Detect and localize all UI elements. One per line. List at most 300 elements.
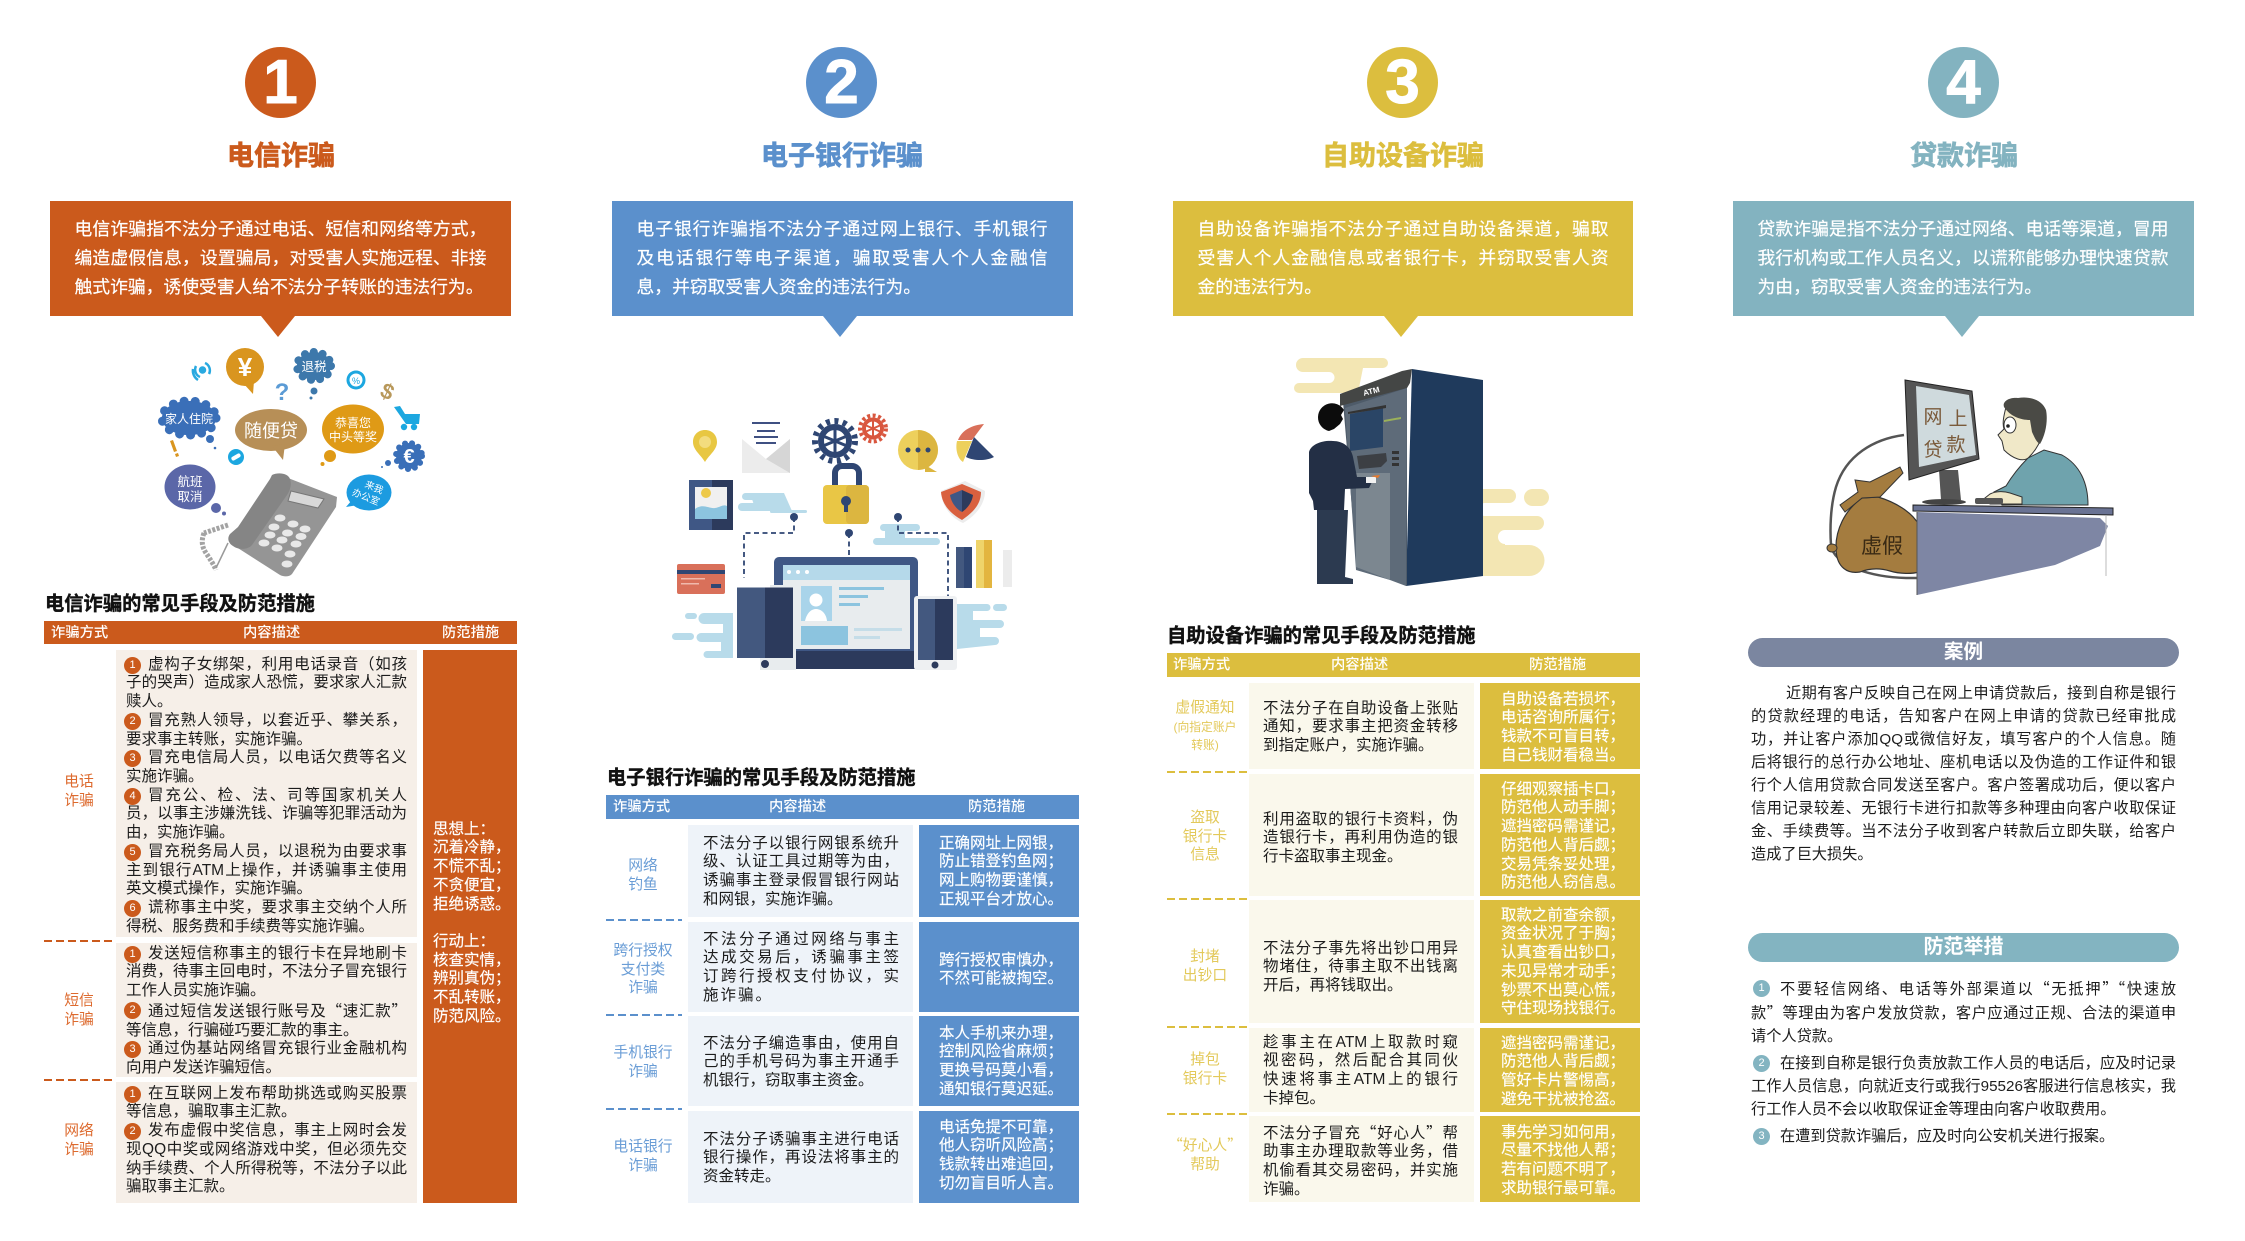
table header row: 防范措施: [442, 625, 499, 641]
text block: case study: 行个人信用贷款合同发送至客户。客户签署成功后，便以客户: [1751, 776, 2176, 794]
cell: telephone banking prevention: 他人窃听风险高；: [939, 1137, 1063, 1154]
icon: exclamation: [170, 440, 179, 457]
cell: prevention measures: 不乱转账，: [433, 989, 511, 1006]
cell: phone fraud description: 3: [129, 752, 136, 764]
text block: case study: 金、手续费等。当不法分子收到客户转款后立即失联，给客户: [1751, 822, 2176, 840]
cell: phone fraud description: 冒充电信局人员，以电话欠费等名义: [148, 749, 407, 766]
cell: good samaritan prevention: [1480, 1116, 1640, 1202]
person: [1309, 403, 1380, 584]
table header row: 诈骗方式: [613, 799, 670, 815]
connectors: [744, 517, 948, 598]
callout: telecom fraud definition: 触式诈骗，诱使受害人给不法分子转账的违法行为。: [74, 276, 483, 296]
decorative clouds: [1294, 358, 1549, 576]
badge: number 1: [245, 47, 316, 118]
cell: phone fraud description: 要求事主转账，实施诈骗。: [126, 731, 312, 748]
cell: card swap description: 视密码，然后配合其同伙: [1263, 1052, 1458, 1069]
cell: stolen card prevention: 交易凭条妥处理，: [1501, 856, 1625, 873]
cell: blocked slot prevention: 守住现场找银行。: [1501, 1000, 1625, 1017]
cell: good samaritan prevention: 若有问题不明了，: [1501, 1161, 1625, 1178]
cell: mobile banking description: 不法分子编造事由，使用自: [703, 1035, 899, 1052]
cell: SMS fraud description: 工作人员实施诈骗。: [126, 982, 266, 999]
cell: card swap description: [1249, 1028, 1474, 1112]
cell: cross-bank description: 达成交易后，诱骗事主签: [703, 949, 899, 966]
cell: SMS fraud description: 向用户发送诈骗短信。: [126, 1059, 281, 1076]
bubble: come to my office: 来我: [363, 479, 385, 497]
cell: prevention measures: 辨别真伪；: [433, 970, 511, 987]
cell: internet fraud description: [116, 1082, 417, 1203]
bubble: congratulations first prize: 恭喜您: [335, 415, 371, 430]
label: phishing: [628, 857, 658, 893]
label: card swap: [1183, 1051, 1227, 1087]
icon: desk telephone: [202, 473, 337, 576]
cell: card swap prevention: 管好卡片警惕高，: [1501, 1072, 1625, 1089]
illustration: man at computer with online loan and fake money bag: [1826, 379, 2114, 595]
text block: case study: 信用记录较差、无银行卡进行扣款等多种理由向客户收取保证: [1751, 800, 2176, 816]
label: telephone banking: 诈骗: [628, 1158, 658, 1174]
icon: bank card: [677, 564, 725, 594]
cell: mobile banking prevention: [919, 1016, 1079, 1106]
table: self-service device fraud methods and prevention: [1167, 624, 1640, 1202]
cell: prevention measures: 防范风险。: [433, 1008, 511, 1025]
callout: loan fraud definition: 我行机构或工作人员名义，以谎称能够办理快速贷款: [1758, 248, 2168, 268]
heading: telecom fraud: 电信诈骗: [227, 140, 335, 170]
cell: prevention measures: [423, 650, 517, 1203]
cell: internet fraud description: 在互联网上发布帮助挑选或购买股票: [148, 1085, 407, 1102]
table heading: 电子银行诈骗的常见手段及防范措施: [607, 768, 916, 789]
label: phishing: 网络: [628, 858, 658, 874]
table header row: [606, 795, 1079, 819]
icon: chat bubble: [898, 430, 938, 472]
table header row: 诈骗方式: [51, 625, 108, 641]
bubble: flight cancelled: 航班: [177, 474, 203, 489]
cell: blocked slot prevention: 取款之前查余额，: [1501, 907, 1625, 924]
man at keyboard: [1975, 398, 2088, 505]
cell: SMS fraud description: 等信息，行骗碰巧要汇款的事主。: [126, 1022, 359, 1039]
cell: internet fraud description: 现QQ中奖或网络游戏中奖，但必须先交: [126, 1141, 407, 1158]
text block: case study: [1751, 684, 2176, 862]
table heading: 自助设备诈骗的常见手段及防范措施: [1167, 626, 1476, 647]
table header row: 内容描述: [1331, 657, 1388, 673]
cell: mobile banking description: 己的手机号码为事主开通手: [703, 1053, 899, 1070]
cell: phishing prevention: [919, 825, 1079, 917]
callout: loan fraud definition: [1733, 201, 2194, 337]
label: blocked cash slot: [1183, 948, 1227, 984]
computer monitor: [1905, 380, 1979, 505]
cell: good samaritan prevention: 求助银行最可靠。: [1501, 1180, 1625, 1197]
cell: fake notice description: 不法分子在自助设备上张贴: [1263, 700, 1458, 717]
cell: fake notice prevention: 自助设备若损坏，: [1501, 691, 1625, 708]
decorative clouds: [672, 493, 1007, 658]
text block: prevention measures: 在接到自称是银行负责放款工作人员的电话后，应及时记录: [1780, 1054, 2176, 1072]
cell: phishing description: [688, 825, 913, 917]
cell: stolen card prevention: 防范他人窃信息。: [1501, 874, 1625, 891]
cell: stolen card prevention: 防范他人动手脚；: [1501, 799, 1625, 816]
cell: cross-bank prevention: [919, 922, 1079, 1012]
money bag labelled fake: [1827, 467, 1919, 573]
cell: blocked slot prevention: [1480, 900, 1640, 1023]
callout: loan fraud definition: 为由，窃取受害人资金的违法行为。: [1758, 276, 2042, 296]
label: internet fraud: [64, 1122, 94, 1158]
computer monitor: 款: [1946, 434, 1966, 456]
icon: dollar: $: [377, 377, 398, 405]
cell: phishing prevention: 正确网址上网银，: [939, 835, 1063, 852]
icon: padlock: [823, 466, 869, 524]
cell: fake notice description: 通知，要求事主把资金转移: [1263, 718, 1458, 735]
label: mobile banking: 诈骗: [628, 1064, 658, 1080]
callout: self-service device fraud definition: [1173, 201, 1633, 337]
cell: mobile banking description: [688, 1016, 913, 1106]
banner: case: 案例: [1944, 641, 1983, 663]
callout: e-banking fraud definition: 及电话银行等电子渠道，骗取受害人个人金融信: [636, 248, 1048, 268]
cell: phishing description: 诱骗事主登录假冒银行网站: [703, 872, 899, 889]
banner: prevention measures: 防范举措: [1924, 936, 2004, 958]
cell: good samaritan description: [1249, 1116, 1474, 1202]
label: internet fraud: 诈骗: [64, 1142, 94, 1158]
cell: telephone banking description: 银行操作，再设法将事主的: [703, 1149, 899, 1166]
bubble: congratulations first prize: [320, 404, 384, 466]
cell: prevention measures: 思想上：: [433, 821, 495, 838]
badge: number 3: 3: [1385, 48, 1420, 117]
cell: telephone banking description: 资金转走。: [703, 1168, 781, 1185]
cell: fake notice description: [1249, 683, 1474, 769]
text block: prevention measures: 3: [1758, 1130, 1765, 1142]
cell: prevention measures: 行动上：: [433, 933, 495, 950]
badge: number 3: [1367, 47, 1438, 118]
label: blocked cash slot: 出钞口: [1183, 968, 1227, 984]
cell: prevention measures: 沉着冷静，: [433, 839, 511, 856]
text block: prevention measures: 工作人员信息，向就近支行或我行95526客服进行信息核实，我: [1751, 1078, 2176, 1094]
label: fake notice: [1174, 699, 1236, 752]
table: telecom fraud methods and prevention: [44, 592, 517, 1203]
cell: card swap prevention: 避免干扰被抢盗。: [1501, 1091, 1625, 1108]
cell: fake notice prevention: [1480, 683, 1640, 769]
cell: phishing prevention: 正规平台才放心。: [939, 891, 1063, 908]
text block: case study: 功，并让客户添加QQ或微信好友，填写客户的个人信息。随: [1751, 730, 2176, 748]
label: cross-bank authorisation: 诈骗: [628, 980, 658, 996]
ATM machine: ATM: [1362, 385, 1381, 398]
label: internet fraud: 网络: [64, 1123, 94, 1139]
bubble: yen: [226, 348, 264, 394]
table header row: 诈骗方式: [1173, 657, 1230, 673]
bubble: family hospitalised: [162, 401, 216, 449]
bubble: euro: €: [403, 446, 415, 468]
table header row: 内容描述: [243, 625, 300, 641]
cell: stolen card description: 造银行卡，再利用伪造的银: [1263, 829, 1458, 846]
bubble: flight cancelled: 取消: [177, 490, 203, 504]
bubble: congratulations first prize: 中头等奖: [329, 429, 377, 444]
desk: [1913, 505, 2113, 595]
cell: phone fraud description: 1: [129, 659, 136, 671]
cell: phishing description: 和网银，实施诈骗。: [703, 891, 843, 908]
cell: SMS fraud description: 发送短信称事主的银行卡在异地刷卡: [148, 945, 407, 962]
label: SMS fraud: [64, 992, 94, 1028]
label: phishing: 钓鱼: [628, 877, 658, 893]
icon: wifi signal: [193, 363, 210, 380]
label: stolen card data: 信息: [1190, 847, 1220, 863]
label: good samaritan help: “好心人”: [1168, 1134, 1242, 1155]
cell: stolen card prevention: [1480, 774, 1640, 896]
heading: e-banking fraud: 电子银行诈骗: [761, 140, 923, 170]
label: phone fraud: [64, 773, 94, 809]
cell: blocked slot prevention: 认真查看出钞口，: [1501, 944, 1625, 961]
cell: card swap prevention: 防范他人背后觑；: [1501, 1053, 1625, 1070]
icon: navy gear: [815, 421, 855, 461]
cell: blocked slot prevention: 未见异常才动手；: [1501, 963, 1625, 980]
cell: stolen card prevention: 防范他人背后觑；: [1501, 837, 1625, 854]
cell: card swap description: 趁事主在ATM上取款时窥: [1263, 1034, 1458, 1051]
cell: good samaritan description: 助事主办理取款等业务，借: [1263, 1143, 1458, 1160]
cell: card swap prevention: [1480, 1028, 1640, 1112]
text block: prevention measures: 不要轻信网络、电话等外部渠道以“无抵押”“快速放: [1780, 976, 2176, 998]
cell: stolen card prevention: 仔细观察插卡口，: [1501, 781, 1625, 798]
cell: phishing description: 不法分子以银行网银系统升: [703, 835, 899, 852]
cell: telephone banking prevention: 电话免提不可靠，: [939, 1119, 1063, 1136]
text block: prevention measures: 在遭到贷款诈骗后，应及时向公安机关进行报案。: [1780, 1128, 2114, 1144]
cell: internet fraud description: 发布虚假中奖信息，事主上网时会发: [148, 1122, 407, 1139]
label: card swap: 掉包: [1190, 1052, 1220, 1068]
label: stolen card data: 银行卡: [1183, 829, 1227, 845]
cell: stolen card description: 利用盗取的银行卡资料，伪: [1263, 811, 1458, 828]
cell: good samaritan description: 诈骗。: [1263, 1181, 1310, 1198]
cell: mobile banking prevention: 控制风险省麻烦；: [939, 1043, 1063, 1060]
cell: phone fraud description: 谎称事主中奖，要求事主交纳个人所: [148, 899, 407, 916]
illustration: online banking devices and icons: [672, 414, 1012, 670]
computer monitor: 贷: [1923, 439, 1943, 461]
cell: blocked slot description: 不法分子事先将出钞口用异: [1263, 940, 1458, 957]
cell: SMS fraud description: 1: [129, 948, 136, 960]
callout: e-banking fraud definition: 电子银行诈骗指不法分子通过网上银行、手机银行: [636, 218, 1048, 238]
cell: cross-bank description: 不法分子通过网络与事主: [703, 931, 899, 948]
cell: telephone banking prevention: [919, 1111, 1079, 1203]
label: stolen card data: 盗取: [1190, 810, 1220, 826]
cell: stolen card prevention: 遮挡密码需谨记，: [1501, 818, 1625, 835]
badge: number 1: 1: [263, 48, 298, 117]
cell: phone fraud description: [116, 650, 417, 937]
table header row: 防范措施: [1529, 657, 1586, 673]
bubble: flight cancelled: [164, 464, 226, 516]
label: SMS fraud: 短信: [64, 993, 94, 1009]
label: telephone banking: [613, 1138, 673, 1174]
cell: prevention measures: 核查实情，: [433, 952, 511, 969]
heading: loan fraud: 贷款诈骗: [1910, 140, 2018, 170]
cell: prevention measures: 拒绝诱惑。: [433, 896, 511, 913]
table header row: [1167, 653, 1640, 677]
cell: stolen card description: 行卡盗取事主现金。: [1263, 848, 1403, 865]
label: SMS fraud: 诈骗: [64, 1012, 94, 1028]
icon: shield: [941, 481, 985, 523]
label: fake notice: 转账): [1191, 738, 1219, 752]
cell: internet fraud description: 骗取事主汇款。: [126, 1178, 235, 1195]
cell: prevention measures: 不慌不乱；: [433, 858, 511, 875]
callout: self-service device fraud definition: 金的违法行为。: [1198, 276, 1322, 296]
cell: cross-bank description: 施诈骗。: [703, 987, 773, 1004]
cell: phone fraud description: 6: [129, 902, 136, 914]
cell: internet fraud description: 纳手续费、个人所得税等，不法分子以此: [126, 1160, 407, 1177]
cell: phone fraud description: 主到银行ATM上操作，并诱骗事主使用: [126, 862, 407, 879]
illustration: telephone with scam speech bubbles: [158, 348, 425, 576]
cell: fake notice prevention: 电话咨询所属行；: [1501, 709, 1625, 726]
banner: prevention measures: [1748, 933, 2179, 962]
cell: phone fraud description: 实施诈骗。: [126, 768, 204, 785]
bubble: euro: [381, 443, 422, 469]
cell: SMS fraud description: 消费，待事主回电时，不法分子冒充银行: [126, 963, 407, 980]
cell: phone fraud description: 员，以事主涉嫌洗钱、诈骗等犯罪活动为: [126, 805, 407, 822]
cell: good samaritan description: 机偷看其交易密码，并实施: [1263, 1162, 1458, 1179]
label: blocked cash slot: 封堵: [1190, 949, 1220, 965]
cell: mobile banking prevention: 通知银行莫迟延。: [939, 1081, 1063, 1098]
table header row: 防范措施: [968, 799, 1025, 815]
cell: telephone banking description: 不法分子诱骗事主进行电话: [703, 1131, 899, 1148]
cell: SMS fraud description: 通过短信发送银行账号及“速汇款”: [148, 999, 407, 1021]
illustration: person using ATM: [1294, 358, 1549, 586]
icon: shopping cart: [394, 406, 420, 430]
bubble: come to my office: 办公室: [350, 486, 381, 508]
heading: self-service device fraud: 自助设备诈骗: [1322, 140, 1484, 170]
cell: phishing prevention: 防止错登钓鱼网；: [939, 853, 1063, 870]
text block: prevention measures: 1: [1758, 982, 1765, 994]
icon: laptop: [774, 557, 918, 669]
cell: phone fraud description: 5: [129, 846, 136, 858]
table heading: 电信诈骗的常见手段及防范措施: [45, 594, 315, 614]
text block: case study: 近期有客户反映自己在网上申请贷款后，接到自称是银行: [1786, 684, 2176, 702]
badge: number 4: 4: [1946, 48, 1981, 117]
callout: e-banking fraud definition: [612, 201, 1073, 337]
icon: phone: [914, 596, 957, 670]
cell: cross-bank prevention: 不然可能被掏空。: [939, 970, 1063, 987]
cell: phone fraud description: 虚构子女绑架，利用电话录音（如孩: [148, 656, 407, 673]
cell: SMS fraud description: 2: [129, 1004, 136, 1016]
bubble: yen: ¥: [238, 352, 253, 382]
cable: [1831, 435, 1917, 578]
label: mobile banking: [613, 1044, 673, 1080]
label: phone fraud: 电话: [64, 774, 94, 790]
cell: good samaritan prevention: 事先学习如何用，: [1501, 1124, 1625, 1141]
icon: percent: [346, 370, 366, 390]
cell: phone fraud description: 得税、服务费和手续费等实施诈骗。: [126, 918, 374, 935]
cell: phone fraud description: 冒充税务局人员，以退税为由要求事: [148, 843, 407, 860]
cell: phone fraud description: 英文模式操作，实施诈骗。: [126, 880, 312, 897]
cell: prevention measures: 不贪便宜，: [433, 877, 511, 894]
callout: telecom fraud definition: [50, 201, 511, 337]
text block: case study: 后将银行的总行办公地址、座机电话以及伪造的工作证件和银: [1751, 754, 2176, 770]
cell: phone fraud description: 冒充公、检、法、司等国家机关人: [148, 787, 407, 804]
badge: number 4: [1928, 47, 1999, 118]
cell: blocked slot prevention: 钞票不出莫心慌，: [1501, 982, 1625, 999]
label: fake notice: (向指定账户: [1174, 720, 1236, 734]
cell: mobile banking description: 机银行，窃取事主资金。: [703, 1072, 874, 1089]
text block: prevention measures: 行工作人员不会以收取保证金等理由向客户收取费用。: [1751, 1100, 2116, 1118]
cell: blocked slot description: [1249, 900, 1474, 1023]
cell: mobile banking prevention: 本人手机来办理，: [939, 1025, 1063, 1042]
cell: internet fraud description: 等信息，骗取事主汇款。: [126, 1103, 297, 1120]
label: mobile banking: 手机银行: [613, 1045, 673, 1061]
bubble: tax refund: 退税: [301, 360, 327, 374]
cell: telephone banking prevention: 切勿盲目听人言。: [939, 1175, 1063, 1192]
label: good samaritan help: [1168, 1134, 1242, 1173]
icon: tablet: [737, 585, 796, 670]
icon: envelope: [742, 422, 790, 473]
icon: picture frame: [689, 480, 733, 530]
badge: number 2: [806, 47, 877, 118]
cell: phishing description: 级、认证工具过期等为由，: [703, 853, 899, 870]
bubble: easy loan: 随便贷: [244, 421, 298, 441]
table header row: 内容描述: [769, 799, 826, 815]
cell: card swap prevention: 遮挡密码需谨记，: [1501, 1035, 1625, 1052]
label: cross-bank authorisation: 支付类: [621, 962, 665, 978]
label: telephone banking: 电话银行: [613, 1139, 673, 1155]
computer monitor: 网: [1923, 407, 1943, 428]
cell: internet fraud description: 2: [129, 1125, 136, 1137]
cell: SMS fraud description: [116, 943, 417, 1077]
cell: good samaritan prevention: 尽量不找他人帮；: [1501, 1142, 1625, 1159]
cell: fake notice prevention: 钱款不可盲目转，: [1501, 728, 1625, 745]
callout: self-service device fraud definition: 受害人个人金融信息或者银行卡，并窃取受害人资: [1198, 248, 1608, 268]
text block: case study: 的贷款经理的电话，告知客户在网上申请的贷款已经审批成: [1751, 708, 2176, 724]
icon: question mark: ?: [275, 379, 289, 406]
cell: stolen card description: [1249, 774, 1474, 896]
cell: phone fraud description: 冒充熟人领导，以套近乎、攀关系，: [148, 712, 407, 729]
cell: SMS fraud description: 通过伪基站网络冒充银行业金融机构: [148, 1040, 407, 1057]
cell: fake notice description: 到指定账户，实施诈骗。: [1263, 737, 1434, 754]
bubble: tax refund: [297, 352, 331, 400]
cell: cross-bank description: [688, 922, 913, 1012]
cell: SMS fraud description: 3: [129, 1043, 136, 1055]
label: card swap: 银行卡: [1183, 1071, 1227, 1087]
cell: internet fraud description: 1: [129, 1088, 136, 1100]
icon: pie chart: [956, 424, 994, 462]
callout: telecom fraud definition: 电信诈骗指不法分子通过电话、短信和网络等方式，: [74, 218, 486, 238]
callout: self-service device fraud definition: 自助设备诈骗指不法分子通过自助设备渠道，骗取: [1198, 218, 1608, 238]
text block: case study: 造成了巨大损失。: [1751, 846, 1872, 862]
icon: location pin: [693, 430, 717, 462]
cell: telephone banking prevention: 钱款转出难追回，: [939, 1156, 1063, 1173]
table header row: [44, 621, 517, 644]
callout: telecom fraud definition: 编造虚假信息，设置骗局，对受害人实施远程、非接: [74, 248, 486, 268]
callout: loan fraud definition: 贷款诈骗是指不法分子通过网络、电话等渠道，冒用: [1758, 218, 2168, 238]
badge: number 2: 2: [824, 48, 859, 117]
ATM machine: [1340, 369, 1483, 586]
label: good samaritan help: 帮助: [1190, 1157, 1220, 1173]
bubble: easy loan: [235, 409, 307, 460]
label: fake notice: 虚假通知: [1175, 700, 1235, 716]
cell: good samaritan description: 不法分子冒充“好心人”帮: [1263, 1121, 1458, 1143]
text block: prevention measures: 款”等理由为客户发放贷款，客户应通过正规、合法的渠道申: [1751, 1000, 2176, 1022]
cell: fake notice prevention: 自己钱财看稳当。: [1501, 747, 1625, 764]
cell: phone fraud description: 2: [129, 715, 136, 727]
cell: telephone banking description: [688, 1111, 913, 1203]
text block: prevention measures: 2: [1758, 1056, 1765, 1068]
icon: red gear: [860, 416, 886, 442]
label: stolen card data: [1183, 809, 1227, 863]
bubble: come to my office: [346, 474, 392, 510]
cell: cross-bank description: 订跨行授权支付协议，实: [703, 968, 899, 985]
label: phone fraud: 诈骗: [64, 793, 94, 809]
cell: card swap description: 快速将事主ATM上的银行: [1263, 1071, 1458, 1088]
icon: no sign: [228, 449, 244, 465]
money bag labelled fake: 虚假: [1861, 535, 1903, 558]
cell: phone fraud description: 4: [129, 790, 136, 802]
cell: phone fraud description: 由，实施诈骗。: [126, 824, 235, 841]
banner: case: [1748, 638, 2179, 667]
cell: cross-bank prevention: 跨行授权审慎办，: [939, 952, 1063, 969]
computer monitor: 上: [1948, 408, 1968, 430]
cell: phone fraud description: 赎人。: [126, 693, 173, 710]
cell: phishing prevention: 网上购物要谨慎，: [939, 872, 1063, 889]
bubble: family hospitalised: 家人住院: [165, 411, 213, 426]
chart bars: [956, 540, 1012, 588]
text block: prevention measures: 请个人贷款。: [1751, 1028, 1842, 1044]
icon: percent: %: [352, 376, 360, 386]
